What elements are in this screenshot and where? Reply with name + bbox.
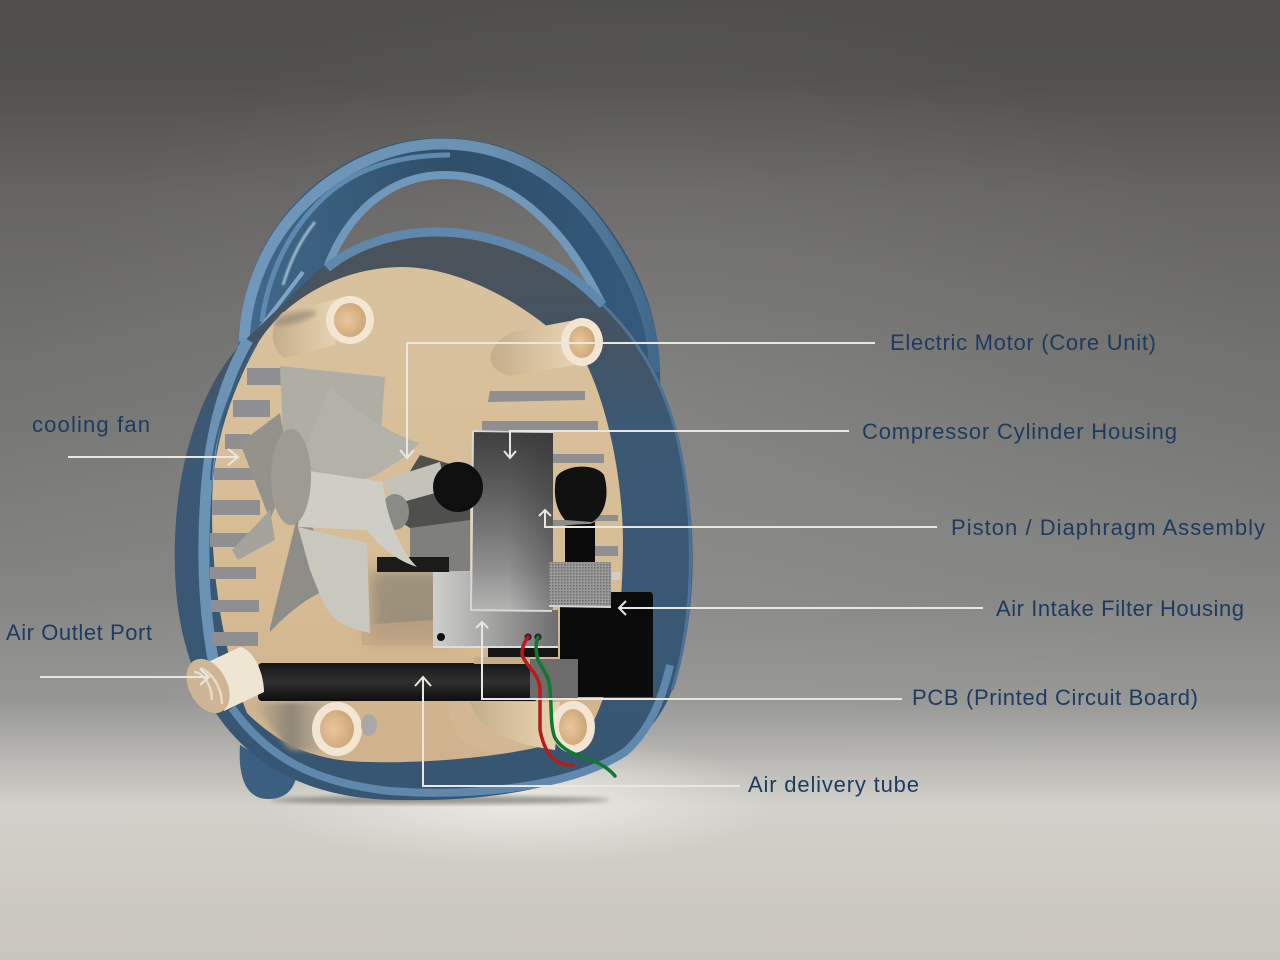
leader: compressor housing [504, 431, 849, 458]
air delivery tube [258, 663, 538, 701]
piston knob right [553, 467, 607, 528]
device cutaway illustration [175, 138, 693, 804]
green wire [534, 634, 615, 776]
vent slots right [482, 391, 618, 556]
mounting post top left [272, 296, 374, 358]
air outlet port [178, 647, 264, 721]
front rim [204, 340, 248, 670]
device foot [240, 745, 296, 799]
motor body [377, 455, 470, 572]
black stem [565, 510, 595, 562]
mounting post top right [491, 318, 603, 376]
floor shadow [270, 796, 610, 804]
beige back plate [212, 267, 623, 762]
compressor cylinder housing [471, 430, 553, 611]
leader: PCB [476, 622, 902, 699]
label: air outlet: Air Outlet Port [6, 620, 152, 645]
PCB base plate [433, 572, 558, 657]
mounting post bottom right [470, 701, 595, 753]
label: PCB: PCB (Printed Circuit Board) [912, 685, 1198, 710]
body top rim [327, 232, 603, 305]
label: air delivery tube: Air delivery tube [748, 772, 919, 797]
red wire [522, 634, 573, 765]
label: cooling fan: cooling fan [32, 412, 150, 437]
leader: piston [539, 510, 937, 527]
label: piston: Piston / Diaphragm Assembly [951, 515, 1265, 540]
filter mesh [549, 562, 620, 607]
cooling fan [232, 366, 420, 633]
leader: cooling fan [68, 449, 238, 465]
leader: air outlet [40, 669, 209, 685]
vent slots left [210, 368, 281, 646]
carrying handle [238, 138, 660, 400]
piston knob left [433, 462, 483, 512]
leader: air delivery tube [415, 677, 740, 786]
grey bracket block [530, 659, 578, 700]
shaded motor cradle [362, 570, 550, 753]
label: compressor housing: Compressor Cylinder Housing [862, 419, 1177, 444]
leader: air intake [619, 601, 983, 615]
label: electric motor: Electric Motor (Core Unit) [890, 330, 1156, 355]
air intake filter box [560, 592, 653, 697]
mounting post bottom left [250, 702, 377, 756]
right wall highlight [603, 305, 690, 690]
beige strip under PCB [474, 657, 530, 664]
label: air intake: Air Intake Filter Housing [996, 596, 1244, 621]
leader: electric motor [400, 343, 875, 458]
body back shell [175, 228, 693, 800]
